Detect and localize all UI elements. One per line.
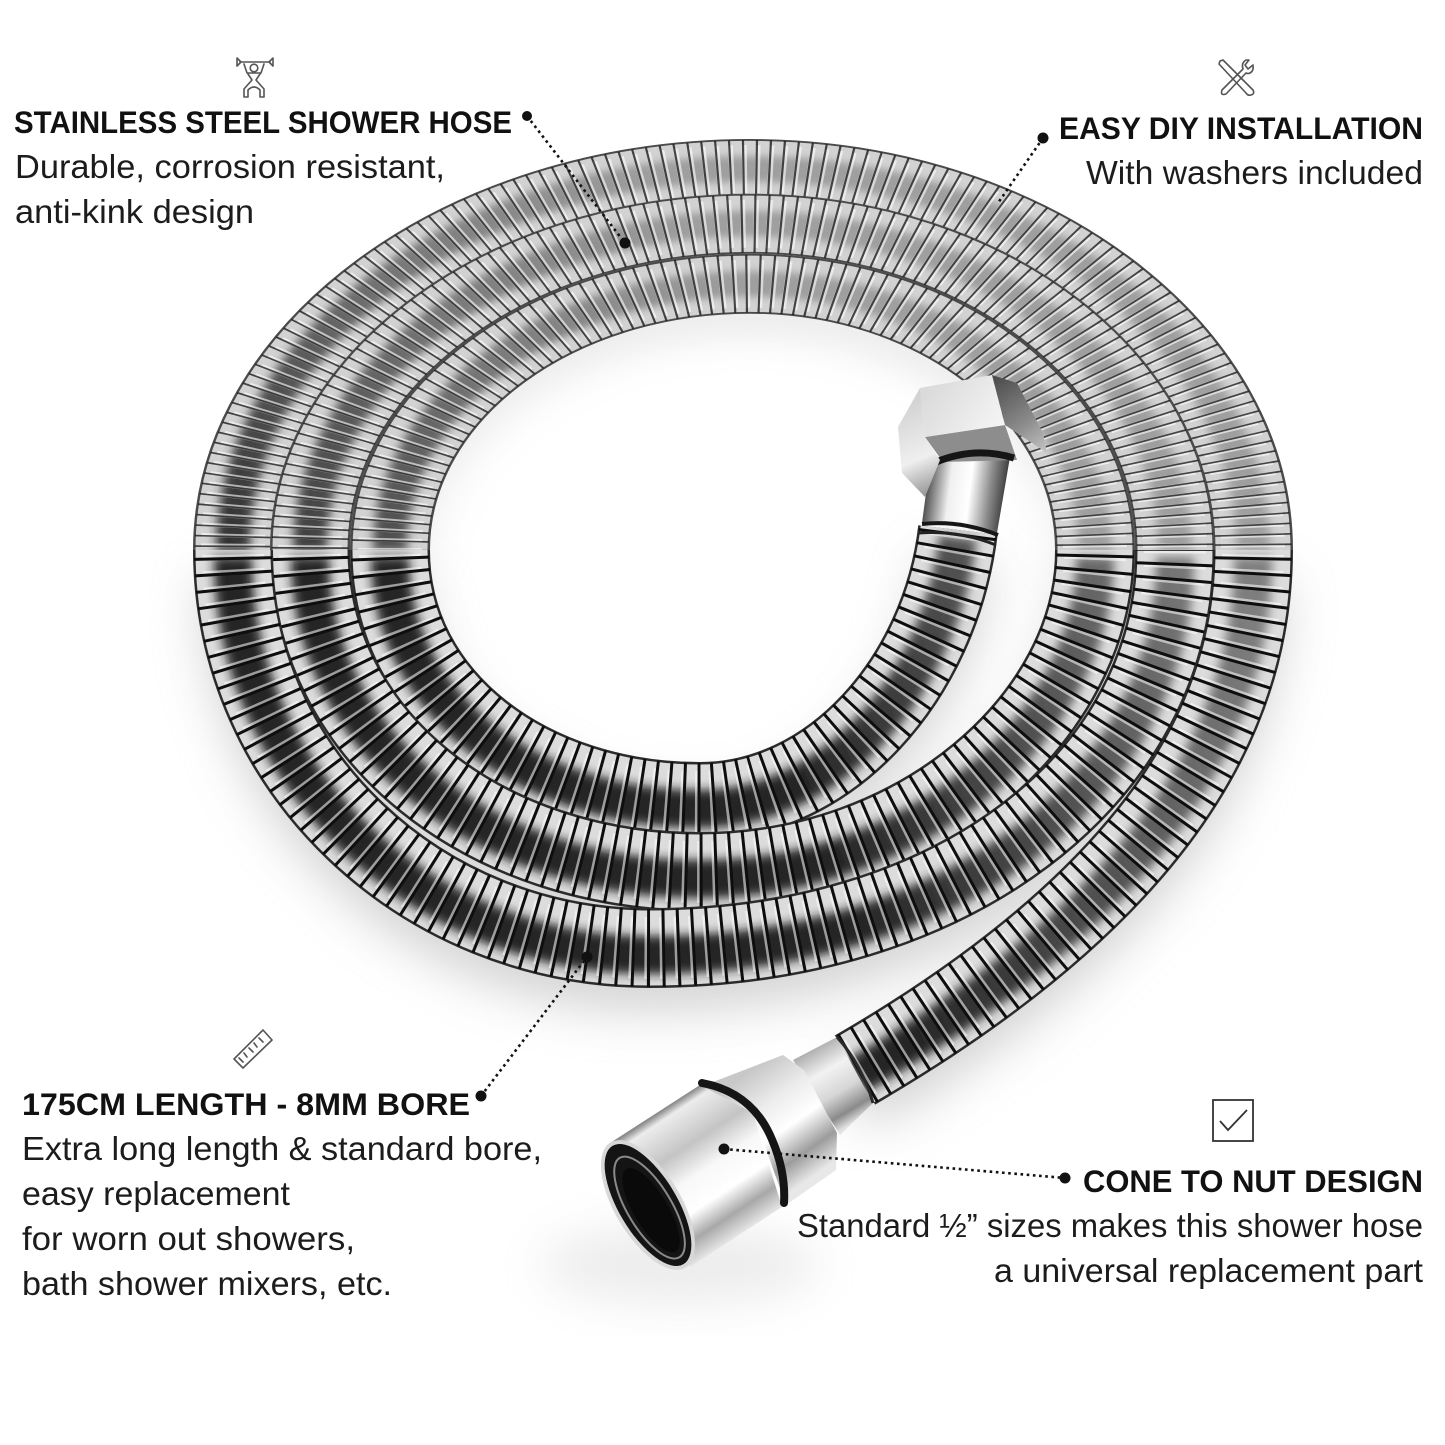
leader line [476, 952, 592, 1102]
callout: easy DIY installation [998, 60, 1423, 203]
icon: checkbox [1213, 1100, 1253, 1141]
hose lower half [233, 530, 1253, 1077]
description [797, 1207, 1423, 1289]
heading: CONE TO NUT DESIGN [1083, 1163, 1423, 1199]
description: Extra long length & standard bore, [22, 1130, 542, 1167]
leader line [718, 1144, 1070, 1184]
heading: 175CM LENGTH - 8MM BORE [22, 1086, 470, 1122]
description [15, 148, 445, 230]
fitting neck [793, 1037, 873, 1135]
shower hose coils [233, 169, 1253, 1077]
callout: 175cm length 8mm bore [22, 952, 592, 1302]
fitting opening [582, 1125, 714, 1285]
description: a universal replacement part [994, 1252, 1423, 1289]
heading: EASY DIY INSTALLATION [1059, 110, 1423, 146]
fitting main body [610, 1085, 782, 1267]
icon: ruler [234, 1030, 272, 1068]
description: for worn out showers, [22, 1220, 355, 1257]
icon: weightlifter [237, 58, 273, 97]
description: easy replacement [22, 1175, 290, 1212]
nut top face [920, 375, 1005, 437]
description: anti-kink design [15, 193, 254, 230]
nut left face [898, 388, 940, 497]
leader line [998, 132, 1048, 203]
description: With washers included [1086, 154, 1423, 191]
icon: tools [1219, 60, 1254, 95]
cone fitting [582, 1037, 873, 1285]
heading: STAINLESS STEEL SHOWER HOSE [14, 104, 512, 140]
callout: stainless steel shower hose [14, 58, 630, 248]
callout: cone to nut design [718, 1100, 1423, 1289]
soft floor shadows [233, 314, 1253, 1305]
description: Standard ½” sizes makes this shower hose [797, 1207, 1423, 1244]
nut lower front [925, 425, 1017, 462]
fitting cone [700, 1055, 837, 1205]
leader line [522, 111, 630, 248]
hex nut fitting [898, 375, 1047, 545]
hose upper half [233, 169, 1253, 550]
description: Durable, corrosion resistant, [15, 148, 445, 185]
black o-ring [702, 1083, 784, 1203]
description [22, 1130, 542, 1302]
nut collar [922, 457, 1010, 533]
description: bath shower mixers, etc. [22, 1265, 392, 1302]
nut right face [992, 375, 1047, 453]
